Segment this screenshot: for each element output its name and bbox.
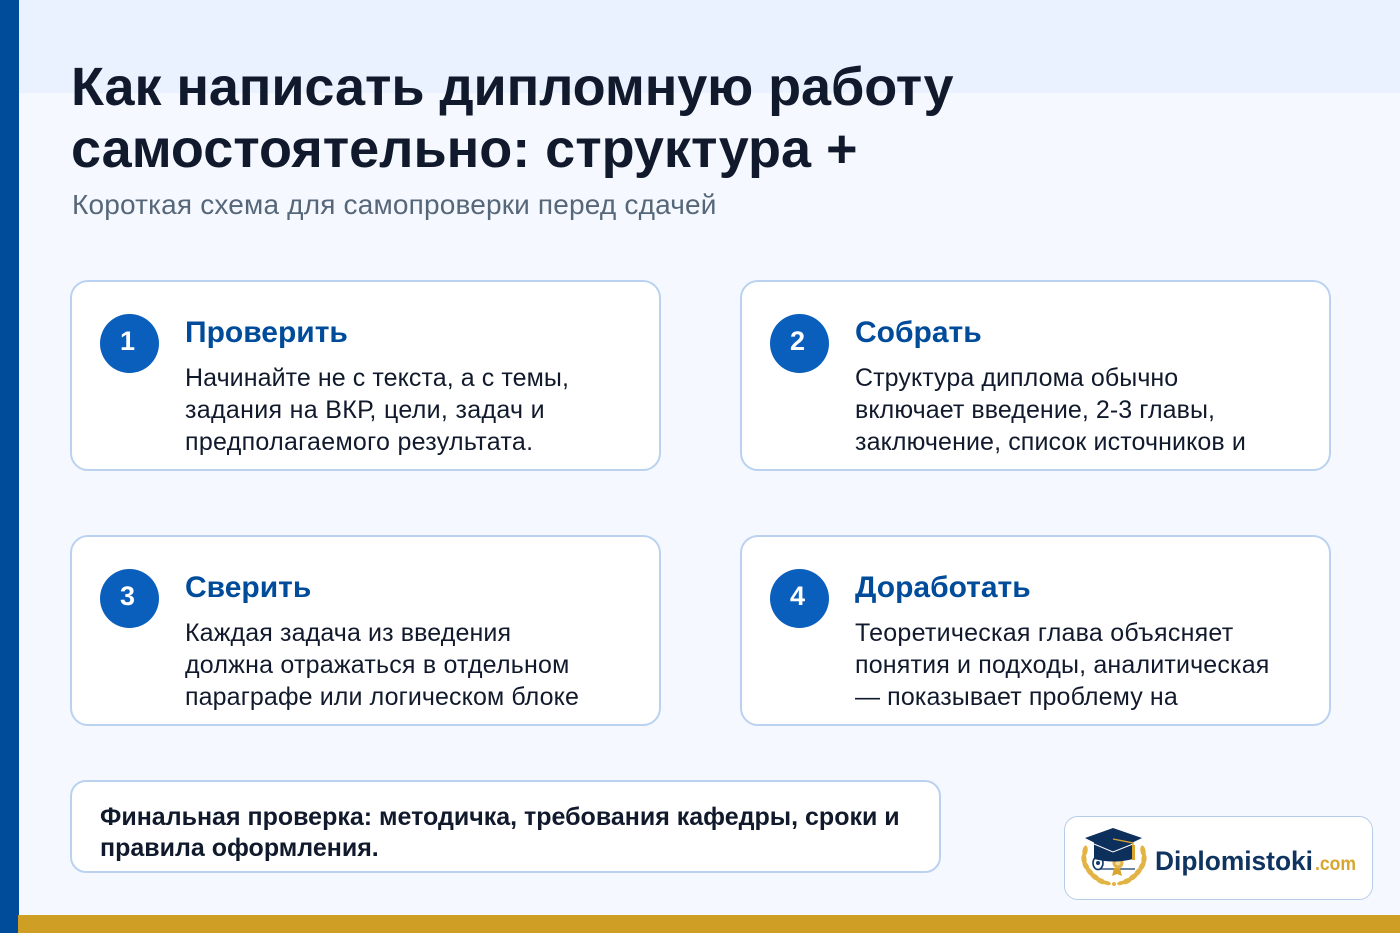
step heading 3: Сверить [185, 571, 311, 604]
step text 2 [855, 364, 1246, 456]
step heading 4: Доработать [855, 571, 1031, 604]
left accent bar [0, 0, 19, 933]
logo card [1064, 816, 1373, 900]
step number 4: 4 [790, 581, 805, 611]
step text 3: должна отражаться в отдельном [185, 651, 570, 679]
step text 4 [855, 619, 1269, 711]
icon: diploma scroll [1093, 856, 1135, 876]
step text 3: параграфе или логическом блоке [185, 683, 579, 711]
logo wordmark: Diplomistoki [1155, 846, 1313, 876]
panel: final check callout [70, 780, 941, 873]
right branch [1117, 845, 1147, 886]
step text 1 [185, 364, 569, 456]
logo: Diplomistoki [1081, 828, 1356, 886]
step text 4: Теоретическая глава объясняет [855, 619, 1233, 647]
wreath bead [1112, 882, 1116, 886]
title [71, 57, 954, 179]
icon: laurel wreath [1081, 845, 1147, 886]
title: самостоятельно: структура + [71, 119, 858, 179]
step number 1 [100, 314, 159, 373]
panel: final check callout: правила оформления. [100, 834, 379, 862]
step text 3: Каждая задача из введения [185, 619, 511, 647]
icon: graduation cap [1085, 828, 1142, 862]
step number 3: 3 [120, 581, 135, 611]
step number 2: 2 [790, 326, 805, 356]
bottom gold bar [18, 915, 1400, 933]
step text 4: понятия и подходы, аналитическая [855, 651, 1269, 679]
header band [19, 0, 1400, 93]
step heading 2: Собрать [855, 316, 982, 349]
step text 2: включает введение, 2-3 главы, [855, 396, 1215, 424]
left branch [1081, 845, 1111, 886]
step text 1: предполагаемого результата. [185, 428, 533, 456]
step number 3 [100, 569, 159, 628]
step text 4: — показывает проблему на [855, 683, 1178, 711]
step number 1: 1 [120, 326, 135, 356]
logo domain: .com [1315, 854, 1356, 875]
panel: step 3 [70, 535, 661, 726]
step text 1: задания на ВКР, цели, задач и [185, 396, 545, 424]
title: Как написать дипломную работу [71, 57, 953, 117]
step text 1: Начинайте не с текста, а с темы, [185, 364, 569, 392]
step text 2: заключение, список источников и [855, 428, 1246, 456]
step text 3 [185, 619, 579, 711]
panel: final check callout: Финальная проверка: методичка, требования кафедры, сроки и [100, 803, 900, 831]
panel: step 1 [70, 280, 661, 471]
step text 2: Структура диплома обычно [855, 364, 1178, 392]
panel: step 2 [740, 280, 1331, 471]
subtitle: Короткая схема для самопроверки перед сдачей [72, 189, 717, 220]
step number 2 [770, 314, 829, 373]
step number 4 [770, 569, 829, 628]
step heading 1: Проверить [185, 316, 348, 349]
panel: step 4 [740, 535, 1331, 726]
